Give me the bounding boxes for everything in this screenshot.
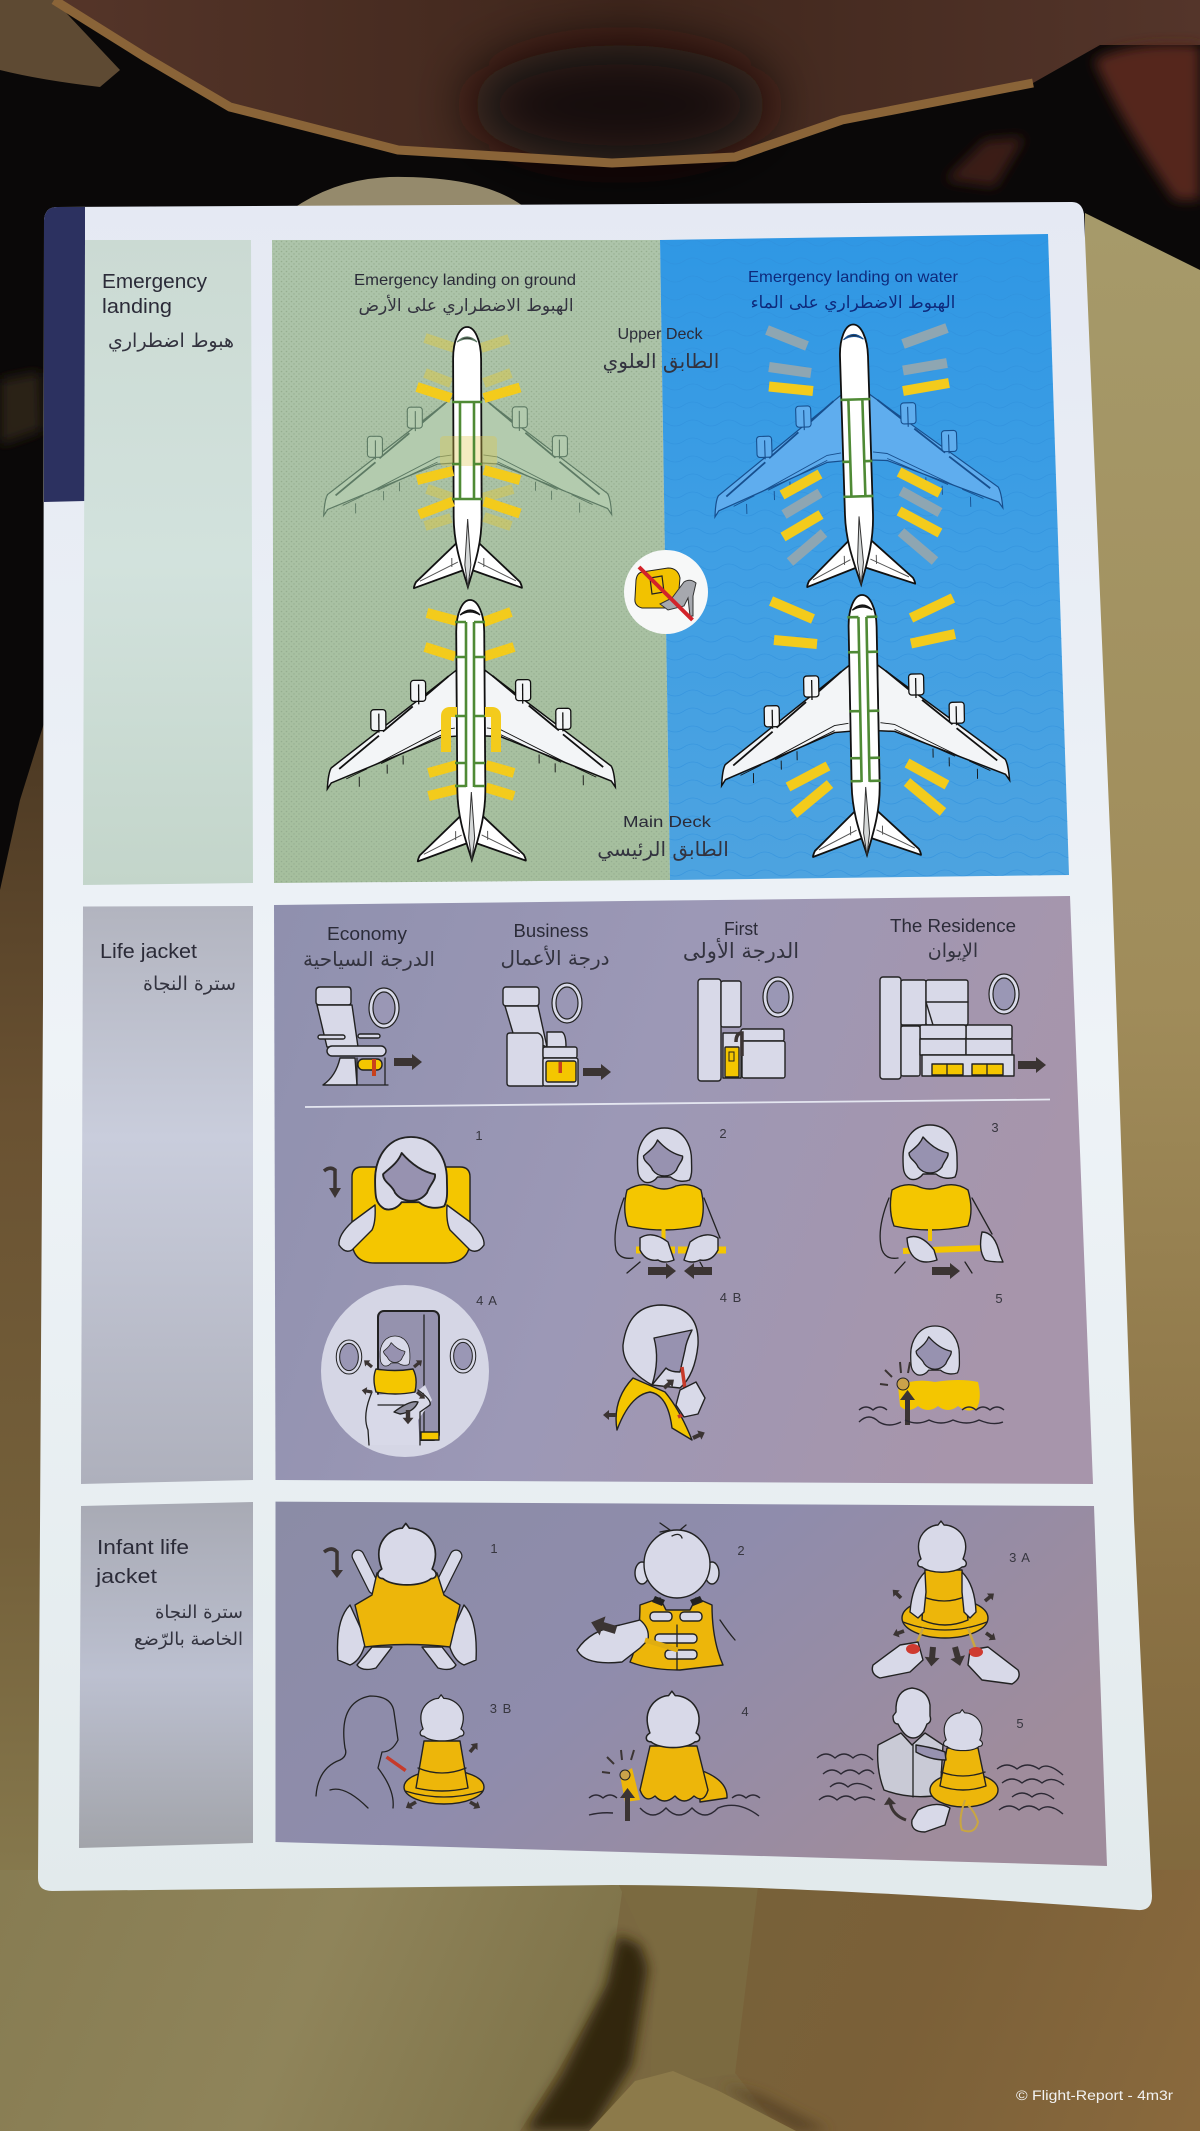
- navy spine strip: [44, 207, 85, 502]
- heading: emergency landing on ground: [354, 272, 576, 316]
- infant step 1: [324, 1523, 498, 1669]
- infant step 2: 2: [737, 1543, 745, 1558]
- infant step 3A: 3 A: [1009, 1550, 1031, 1565]
- panel: landing on water: [660, 234, 1069, 880]
- panel: landing on ground: [272, 240, 670, 883]
- class: the residence: The Residence: [890, 916, 1016, 936]
- infant step 5: 5: [1016, 1716, 1024, 1731]
- class: first: First: [724, 919, 758, 939]
- class: the residence: [880, 916, 1046, 1079]
- class: first: [683, 919, 799, 1081]
- infant step 5: [817, 1688, 1064, 1832]
- heading: infant life jacket: الخاصة بالرّضع: [134, 1629, 243, 1650]
- infant step 1: 1: [490, 1541, 498, 1556]
- text: main deck: الطابق الرئيسي: [597, 837, 729, 862]
- panel: life jacket label: [81, 906, 253, 1484]
- step 5: light in water: [859, 1291, 1004, 1425]
- heading: infant life jacket: Infant life: [97, 1537, 189, 1559]
- class: business: Business: [514, 921, 588, 941]
- infant step 3A: [872, 1521, 1031, 1684]
- panel: life jacket instructions: [274, 896, 1093, 1484]
- class: economy: الدرجة السياحية: [303, 947, 435, 971]
- text: main deck: [597, 814, 729, 862]
- step 5: light in water: 5: [995, 1291, 1003, 1306]
- heading: emergency landing on ground: Emergency landing on ground: [354, 272, 576, 289]
- step 2: pull straps: [615, 1126, 727, 1279]
- heading: emergency landing: Emergency: [102, 271, 207, 293]
- step 4B: blow into tube: 4 B: [720, 1290, 742, 1305]
- diagram: main deck plane on water: [718, 592, 1011, 859]
- class: first: الدرجة الأولى: [683, 938, 799, 963]
- heading: infant life jacket: [95, 1537, 243, 1650]
- text: main deck: Main Deck: [623, 814, 712, 831]
- heading: emergency landing on water: Emergency landing on water: [748, 269, 959, 286]
- infant step 3B: 3 B: [490, 1701, 512, 1716]
- heading: emergency landing: landing: [102, 296, 172, 318]
- heading: emergency landing: هبوط اضطراري: [108, 330, 234, 352]
- watermark: © Flight-Report - 4m3r: [1016, 2088, 1174, 2103]
- step 4A: inflate at the door: [321, 1285, 498, 1457]
- diagram: upper deck plane on water: [709, 320, 1005, 590]
- text: upper deck: الطابق العلوي: [603, 349, 719, 374]
- class: business: [500, 921, 611, 1086]
- heading: infant life jacket: سترة النجاة: [155, 1602, 243, 1623]
- class: economy: [303, 924, 435, 1085]
- heading: life jacket: [100, 941, 236, 995]
- heading: emergency landing on water: الهبوط الاضطراري على الماء: [751, 293, 955, 313]
- heading: life jacket: Life jacket: [100, 941, 197, 963]
- heading: infant life jacket: jacket: [95, 1566, 158, 1588]
- infant step 3B: [316, 1695, 512, 1812]
- class: business: درجة الأعمال: [500, 946, 610, 970]
- infant step 2: [577, 1523, 745, 1670]
- panel: emergency landing diagrams: [272, 234, 1069, 883]
- infant step 4: [589, 1691, 760, 1821]
- heading: life jacket: سترة النجاة: [143, 973, 236, 995]
- step 1: pull jacket over head: [324, 1128, 484, 1263]
- diagram: main deck plane on ground: [326, 599, 616, 862]
- diagram: upper deck plane on ground: [323, 326, 612, 589]
- class: economy: Economy: [327, 924, 407, 944]
- step 4A: inflate at the door: 4 A: [476, 1293, 498, 1308]
- text: upper deck: Upper Deck: [618, 326, 703, 343]
- heading: emergency landing on water: [748, 269, 959, 313]
- text: upper deck: [603, 326, 719, 374]
- heading: emergency landing on ground: الهبوط الاضطراري على الأرض: [358, 295, 574, 316]
- step 1: pull jacket over head: 1: [475, 1128, 483, 1143]
- step 2: pull straps: 2: [719, 1126, 727, 1141]
- panel: emergency landing label: [83, 240, 253, 885]
- infant step 4: 4: [741, 1704, 749, 1719]
- icon: no baggage or high heels: [624, 550, 708, 634]
- step 4B: blow into tube: [603, 1290, 742, 1443]
- class: the residence: الإيوان: [928, 940, 978, 962]
- heading: emergency landing: [102, 271, 234, 352]
- panel: infant jacket instructions: [276, 1502, 1107, 1866]
- panel: infant life jacket label: [79, 1502, 253, 1848]
- step 3: pull tab: 3: [991, 1120, 999, 1135]
- step 3: pull tab: [880, 1120, 1003, 1279]
